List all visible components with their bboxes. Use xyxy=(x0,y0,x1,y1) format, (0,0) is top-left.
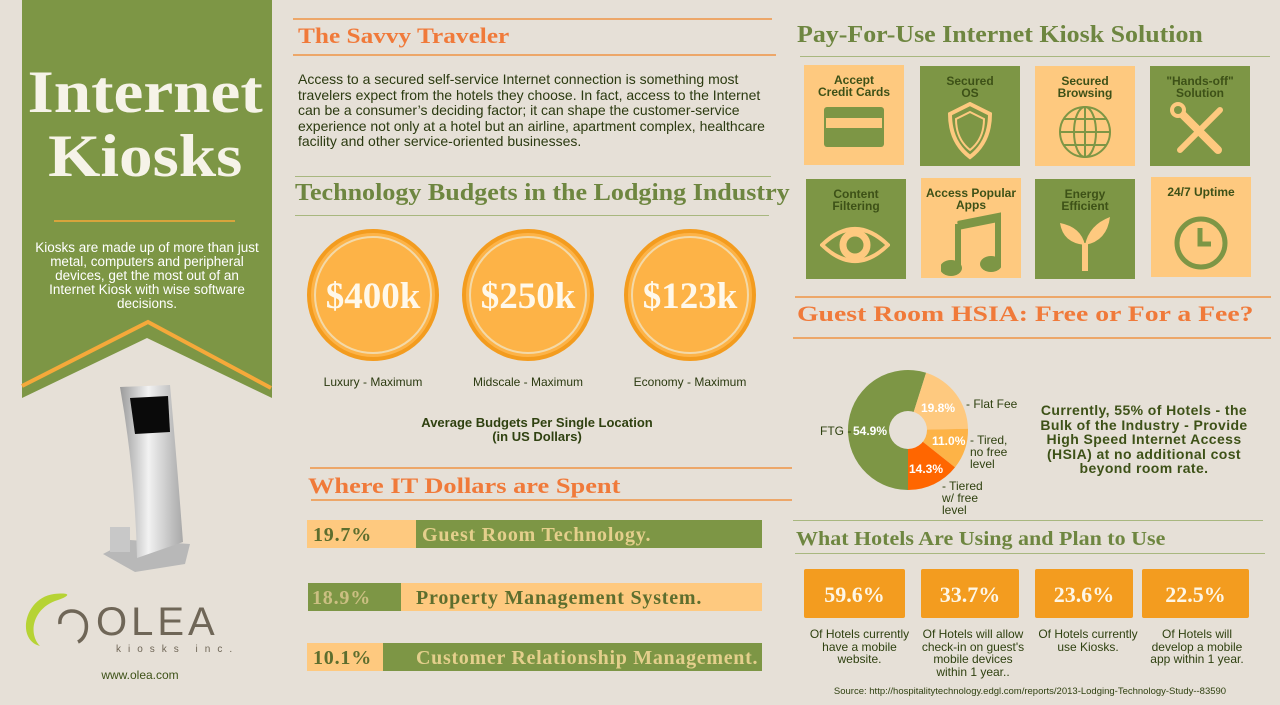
pie chart: 54.9% xyxy=(853,424,887,438)
circles chart: Luxury - Maximum xyxy=(324,375,422,389)
stat: mobile website: 59.6% xyxy=(824,582,885,607)
tile: hands-off: Solution xyxy=(1176,86,1224,100)
tile: credit cards xyxy=(804,65,904,165)
bar: CRM: Customer Relationship Management. xyxy=(416,647,758,669)
pie chart: level xyxy=(942,503,967,517)
bar: PMS xyxy=(308,583,762,611)
circles chart: Midscale - Maximum xyxy=(473,375,583,389)
pie chart: no free xyxy=(970,445,1008,459)
callout: Currently, 55% of Hotels - the Bulk of the Industry - Provide High Speed Internet Access (HSIA) at no additional cost beyond room rate. xyxy=(1040,402,1248,476)
tile: secured browsing xyxy=(1035,66,1135,166)
caption 4: Of Hotels will develop a mobile app within 1 year. xyxy=(1150,627,1244,666)
pie chart: 14.3% xyxy=(909,462,943,476)
tile: secured browsing: Secured xyxy=(1061,74,1109,88)
stat: kiosks: 23.6% xyxy=(1054,582,1114,607)
tile: hands-off: "Hands-off" xyxy=(1166,74,1234,88)
heading: The Savvy Traveler xyxy=(298,23,509,48)
panel: savvy traveler xyxy=(293,18,776,149)
circles chart: $250k xyxy=(481,276,576,317)
title xyxy=(28,59,263,189)
tile: uptime xyxy=(1151,177,1251,277)
tile: content filtering xyxy=(806,179,906,279)
caption 1: Of Hotels currently have a mobile website. xyxy=(810,627,909,666)
bar: guest room: Guest Room Technology. xyxy=(422,524,651,546)
text block: Access to a secured self-service Internet connection is something most travelers expect from the hotels they choose. In fact, access to the Internet can be a consumer’s deciding factor; it can shape the customer-service experience not only at a hotel but an airline, apartment complex, healthcare facility and other service-oriented businesses. xyxy=(298,71,765,149)
circles chart xyxy=(307,229,756,389)
pie chart: FTG - xyxy=(820,424,851,438)
pie chart xyxy=(820,370,1018,517)
tile: credit cards: Accept xyxy=(834,73,874,87)
caption: Average Budgets Per Single Location xyxy=(421,415,653,430)
pie chart: 11.0% xyxy=(932,434,966,448)
heading: Guest Room HSIA: Free or For a Fee? xyxy=(797,301,1254,326)
bar: PMS: 18.9% xyxy=(312,587,371,609)
pie chart: level xyxy=(970,457,995,471)
logo: olea: OLEA xyxy=(96,600,219,644)
stat: mobile app: 22.5% xyxy=(1165,582,1226,607)
pie chart: w/ free xyxy=(941,491,978,505)
heading: Where IT Dollars are Spent xyxy=(308,473,620,498)
icon: kiosk xyxy=(103,385,190,572)
tile: energy xyxy=(1035,179,1135,279)
tile: popular apps xyxy=(921,178,1021,278)
tile: secured OS: Secured xyxy=(946,74,994,88)
stat: kiosks xyxy=(1035,569,1133,618)
pie chart: 19.8% xyxy=(921,401,955,415)
stat: check-in xyxy=(921,569,1019,618)
pie chart: - Tired, xyxy=(970,433,1007,447)
logo: olea xyxy=(26,594,239,654)
circles chart: Economy - Maximum xyxy=(634,375,746,389)
tile: popular apps: Apps xyxy=(956,198,986,212)
stat: mobile app xyxy=(1142,569,1249,618)
bar: PMS: Property Management System. xyxy=(416,587,702,609)
tile: energy: Efficient xyxy=(1061,199,1109,213)
tile: popular apps: Access Popular xyxy=(926,186,1016,200)
stat: mobile website xyxy=(804,569,905,618)
tile: content filtering: Content xyxy=(833,187,879,201)
bar: guest room xyxy=(307,520,762,548)
heading: Pay-For-Use Internet Kiosk Solution xyxy=(797,22,1203,48)
bar: CRM: 10.1% xyxy=(313,647,372,669)
heading: What Hotels Are Using and Plan to Use xyxy=(796,528,1165,550)
tile: secured OS xyxy=(920,66,1020,166)
caption 2: Of Hotels will allow check-in on guest's mobile devices within 1 year.. xyxy=(922,627,1024,678)
stat: check-in: 33.7% xyxy=(940,582,1000,607)
left banner xyxy=(21,0,272,398)
title: Kiosks xyxy=(48,123,242,189)
pie chart: - Tiered xyxy=(942,479,983,493)
intro text: Kiosks are made up of more than just metal, computers and peripheral devices, get the most out of an Internet Kiosk with wise software decisions. xyxy=(35,240,259,311)
title: Internet xyxy=(28,59,263,125)
caption: (in US Dollars) xyxy=(492,429,582,444)
bar: CRM xyxy=(307,643,762,671)
caption xyxy=(421,415,653,444)
tile: credit cards: Credit Cards xyxy=(818,85,890,99)
tile: energy: Energy xyxy=(1065,187,1105,201)
panel: where IT dollars xyxy=(307,467,792,671)
heading: Technology Budgets in the Lodging Industry xyxy=(295,180,790,206)
tile: uptime: 24/7 Uptime xyxy=(1167,185,1235,199)
tile: hands-off xyxy=(1150,66,1250,166)
panel: pay-for-use xyxy=(797,22,1270,279)
tile: content filtering: Filtering xyxy=(832,199,880,213)
pie chart: - Flat Fee xyxy=(966,397,1018,411)
url: www.olea.com xyxy=(101,668,179,682)
panel: technology budgets xyxy=(295,176,790,444)
tile: secured browsing: Browsing xyxy=(1058,86,1112,100)
tile: secured OS: OS xyxy=(961,86,979,100)
circles chart: $400k xyxy=(326,276,421,317)
circles chart: $123k xyxy=(643,276,738,317)
bar: guest room: 19.7% xyxy=(313,524,372,546)
caption 3: Of Hotels currently use Kiosks. xyxy=(1038,627,1138,654)
source: Source: http://hospitalitytechnology.edgl.com/reports/2013-Lodging-Technology-Study--83590 xyxy=(834,686,1226,697)
